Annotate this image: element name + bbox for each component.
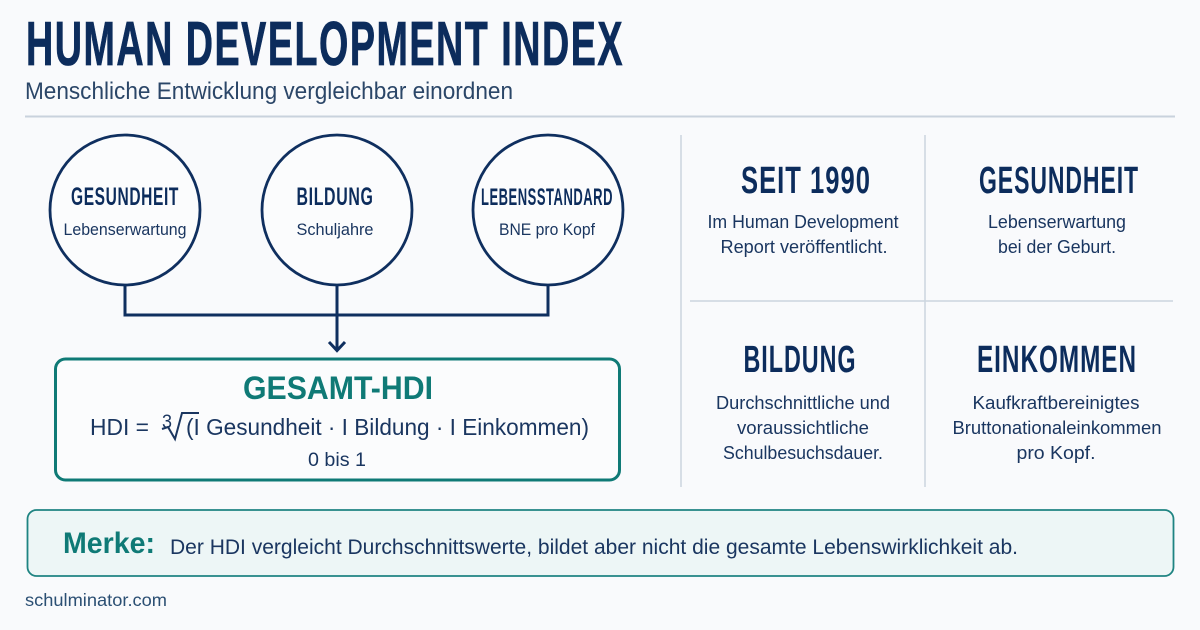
panel: Bildung: Durchschnittliche und bbox=[716, 393, 890, 413]
panel: Einkommen bbox=[952, 339, 1162, 463]
circle: Bildung: BILDUNG bbox=[296, 183, 374, 211]
panel: Gesundheit: bei der Geburt. bbox=[998, 237, 1116, 257]
circle: Bildung bbox=[262, 135, 412, 285]
circle: Gesundheit: Lebenserwartung bbox=[64, 220, 186, 239]
subtitle: Menschliche Entwicklung vergleichbar einordnen bbox=[25, 78, 513, 105]
panel: Einkommen: pro Kopf. bbox=[1016, 443, 1096, 463]
panel: Gesundheit bbox=[979, 160, 1139, 257]
heading: Gesamt-HDI: GESAMT-HDI bbox=[243, 370, 433, 406]
panel: Bildung: BILDUNG bbox=[744, 339, 856, 381]
callout: Merke: Merke: bbox=[63, 527, 155, 560]
panel: three dimensions diagram bbox=[50, 135, 623, 480]
panel: Seit 1990 bbox=[708, 160, 898, 257]
panel: Gesamt-HDI formula bbox=[56, 359, 620, 480]
title: HUMAN DEVELOPMENT INDEX bbox=[26, 10, 624, 79]
callout: Merke bbox=[28, 510, 1174, 576]
callout: Merke: Der HDI vergleicht Durchschnittswerte, bildet aber nicht die gesamte Lebenswirklichkeit ab. bbox=[170, 536, 1018, 559]
grid dividers bbox=[681, 135, 1173, 487]
panel: Einkommen: Kaufkraftbereinigtes bbox=[972, 393, 1140, 413]
formula: 3 bbox=[162, 412, 172, 433]
formula: (I Gesundheit · I Bildung · I Einkommen) bbox=[186, 414, 589, 440]
panel: Bildung: Schulbesuchsdauer. bbox=[723, 443, 883, 463]
panel: Bildung bbox=[716, 339, 890, 463]
panel: Gesundheit: Lebenserwartung bbox=[988, 212, 1126, 232]
panel: Einkommen: Bruttonationaleinkommen bbox=[952, 418, 1162, 438]
circle: Bildung: Schuljahre bbox=[296, 220, 374, 239]
circle: Gesundheit bbox=[50, 135, 200, 285]
circle: Lebensstandard bbox=[473, 135, 623, 285]
range: 0 bis 1 bbox=[308, 450, 366, 471]
footer source: schulminator.com bbox=[25, 590, 167, 610]
circle: Gesundheit: GESUNDHEIT bbox=[71, 183, 179, 211]
panel: Seit 1990: Report veröffentlicht. bbox=[720, 237, 888, 257]
formula: HDI = bbox=[90, 414, 149, 440]
circle: Lebensstandard: LEBENSSTANDARD bbox=[481, 184, 613, 211]
panel: Seit 1990: Im Human Development bbox=[708, 212, 898, 232]
panel: Seit 1990: SEIT 1990 bbox=[741, 160, 871, 202]
connector lines and arrow bbox=[125, 286, 548, 350]
circle: Lebensstandard: BNE pro Kopf bbox=[499, 220, 595, 239]
panel: Bildung: voraussichtliche bbox=[737, 418, 869, 438]
